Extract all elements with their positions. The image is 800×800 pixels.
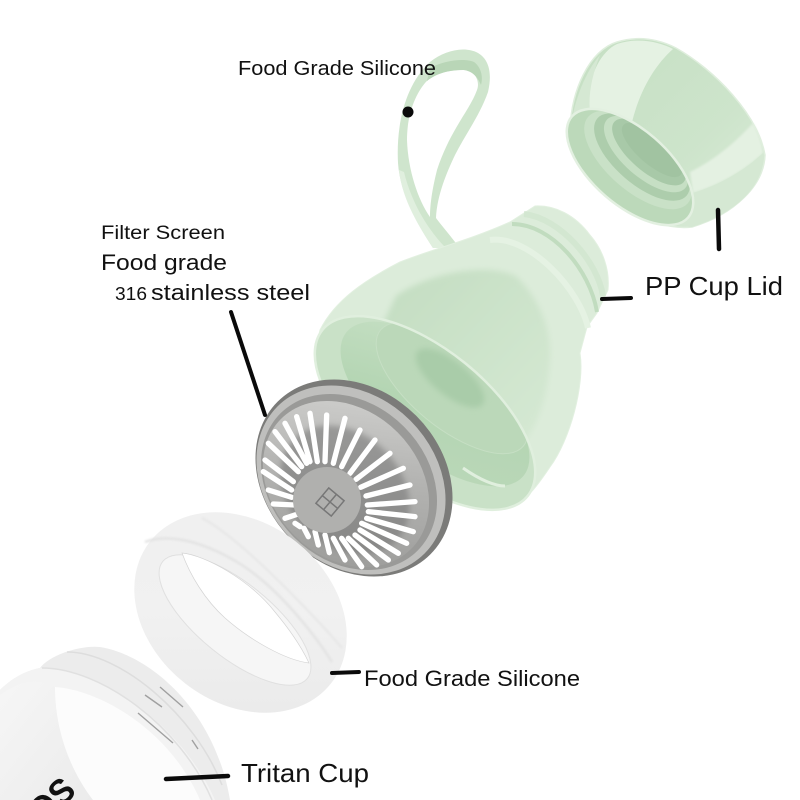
label: tritan cup: Tritan Cup [241, 758, 369, 788]
silicone hanging strap [398, 50, 490, 248]
label: ring material: Food Grade Silicone [364, 666, 580, 691]
label: filter screen: Food grade [101, 250, 227, 275]
filter slots [263, 413, 415, 567]
leader dot: strap [402, 106, 414, 118]
filter hub with stamp [293, 467, 361, 533]
neck threads [490, 214, 603, 328]
cap opening with threads [566, 108, 694, 226]
stainless steel filter screen [215, 339, 493, 617]
label: filter screen: 316 [115, 284, 147, 304]
leader line: silicone ring [332, 672, 359, 673]
PP cup lid body with neck [314, 206, 609, 511]
leader line: tritan cup [166, 776, 228, 779]
label: filter screen: Filter Screen [101, 223, 225, 244]
label: PP cup lid: PP Cup Lid [645, 271, 783, 301]
food grade silicone ring [94, 471, 387, 754]
open rim and interior [314, 318, 534, 511]
label: filter screen [101, 223, 310, 305]
leader line: cup lid body [602, 298, 631, 299]
central shaded area of dome [380, 270, 550, 450]
label: filter screen: stainless steel [151, 280, 310, 305]
PP cup lid cap [566, 38, 766, 228]
leader line: filter screen [231, 312, 265, 415]
tritan cup [0, 647, 230, 800]
leader line: cup lid cap [718, 210, 719, 249]
label: strap material: Food Grade Silicone [238, 58, 436, 80]
